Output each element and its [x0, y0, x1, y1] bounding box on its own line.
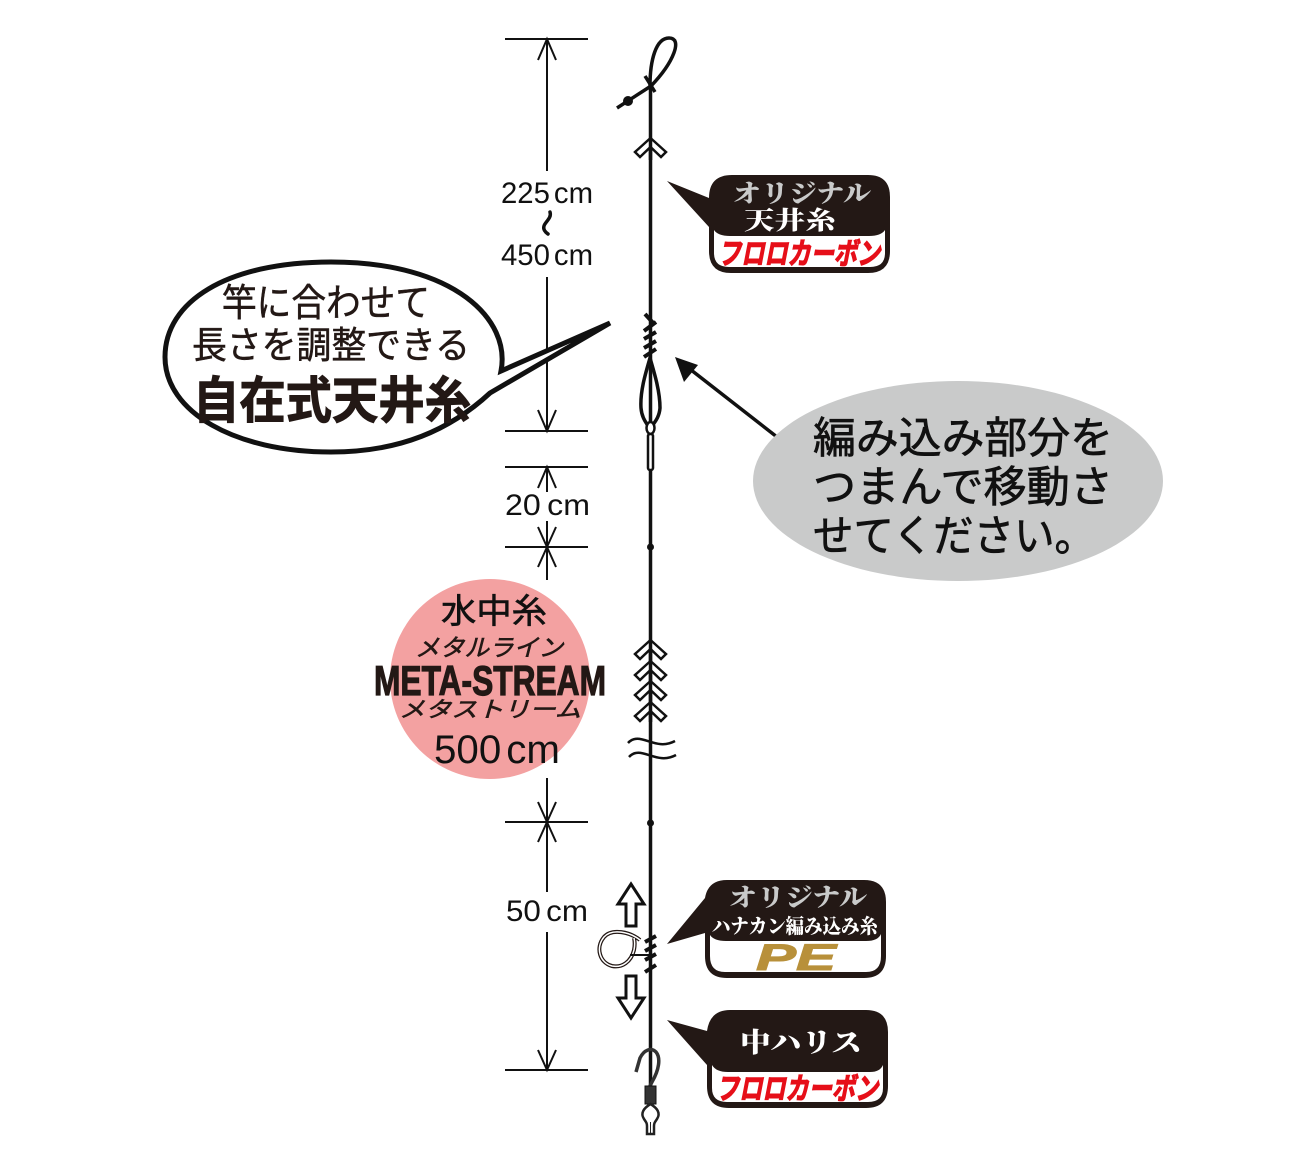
icon: down arrow: [618, 976, 644, 1018]
circle: underwater line Meta-Stream 500cm: 水中糸: [441, 593, 547, 631]
arrow: points to braided section: [675, 357, 777, 437]
icon: nose ring on braid: [599, 932, 656, 972]
callout: adjustable ceiling line speech bubble: 竿に合わせて: [222, 283, 430, 325]
circle: underwater line Meta-Stream 500cm: META-STREAM: [374, 657, 606, 704]
callout: adjustable ceiling line speech bubble: 長さを調整できる: [192, 325, 470, 366]
callout: gray ellipse instructions: つまんで移動さ: [813, 464, 1113, 512]
text: dimension 20cm: 20 cm: [505, 489, 590, 522]
badge: middle leader fluorocarbon: フロロカーボン: [716, 1073, 880, 1106]
circle: underwater line Meta-Stream 500cm: 500cm: [434, 728, 560, 772]
callout: gray ellipse instructions: 編み込み部分を: [813, 415, 1113, 463]
callout: gray ellipse instructions: せてください。: [813, 513, 1095, 561]
icon: triple chevrons group: [635, 640, 666, 722]
circle: underwater line Meta-Stream 500cm: [374, 579, 606, 779]
circle: underwater line Meta-Stream 500cm: メタストリーム: [399, 697, 581, 722]
text: dimension 225cm to 450cm: [501, 177, 593, 272]
badge: original ceiling line fluorocarbon: [667, 174, 890, 273]
badge: original nose ring braid PE: [667, 878, 886, 978]
badge: original ceiling line fluorocarbon: 天井糸: [744, 201, 838, 237]
text: dimension 50cm: 50cm: [506, 895, 588, 928]
badge: middle leader fluorocarbon: 中ハリス: [740, 1021, 862, 1060]
text: dimension 225cm to 450cm: 225cm: [501, 177, 593, 210]
icon: top loop knot: [617, 38, 676, 108]
icon: braided section with loop: [641, 314, 660, 470]
badge: original nose ring braid PE: オリジナル: [729, 878, 867, 914]
callout: adjustable ceiling line speech bubble: [165, 262, 610, 452]
icon: vertical tilde: [544, 212, 550, 234]
badge: original ceiling line fluorocarbon: オリジナル: [733, 174, 871, 210]
dimension lines: [505, 39, 588, 1070]
callout: adjustable ceiling line speech bubble: 自在式天井糸: [193, 373, 471, 429]
icon: hook and swivel: [636, 1050, 659, 1134]
icon: up arrow: [618, 884, 644, 926]
main line: [647, 84, 654, 1100]
circle: underwater line Meta-Stream 500cm: メタルライン: [415, 635, 565, 662]
badge: original ceiling line fluorocarbon: フロロカーボン: [718, 238, 882, 271]
badge: original nose ring braid PE: PE: [756, 937, 838, 978]
icon: single chevron: [635, 138, 666, 160]
badge: middle leader fluorocarbon: [667, 1010, 888, 1108]
badge: original nose ring braid PE: ハナカン編み込み糸: [712, 910, 880, 939]
icon: line break wave: [628, 739, 676, 758]
callout: gray ellipse instructions: [753, 381, 1163, 581]
text: dimension 225cm to 450cm: 450cm: [501, 239, 593, 272]
